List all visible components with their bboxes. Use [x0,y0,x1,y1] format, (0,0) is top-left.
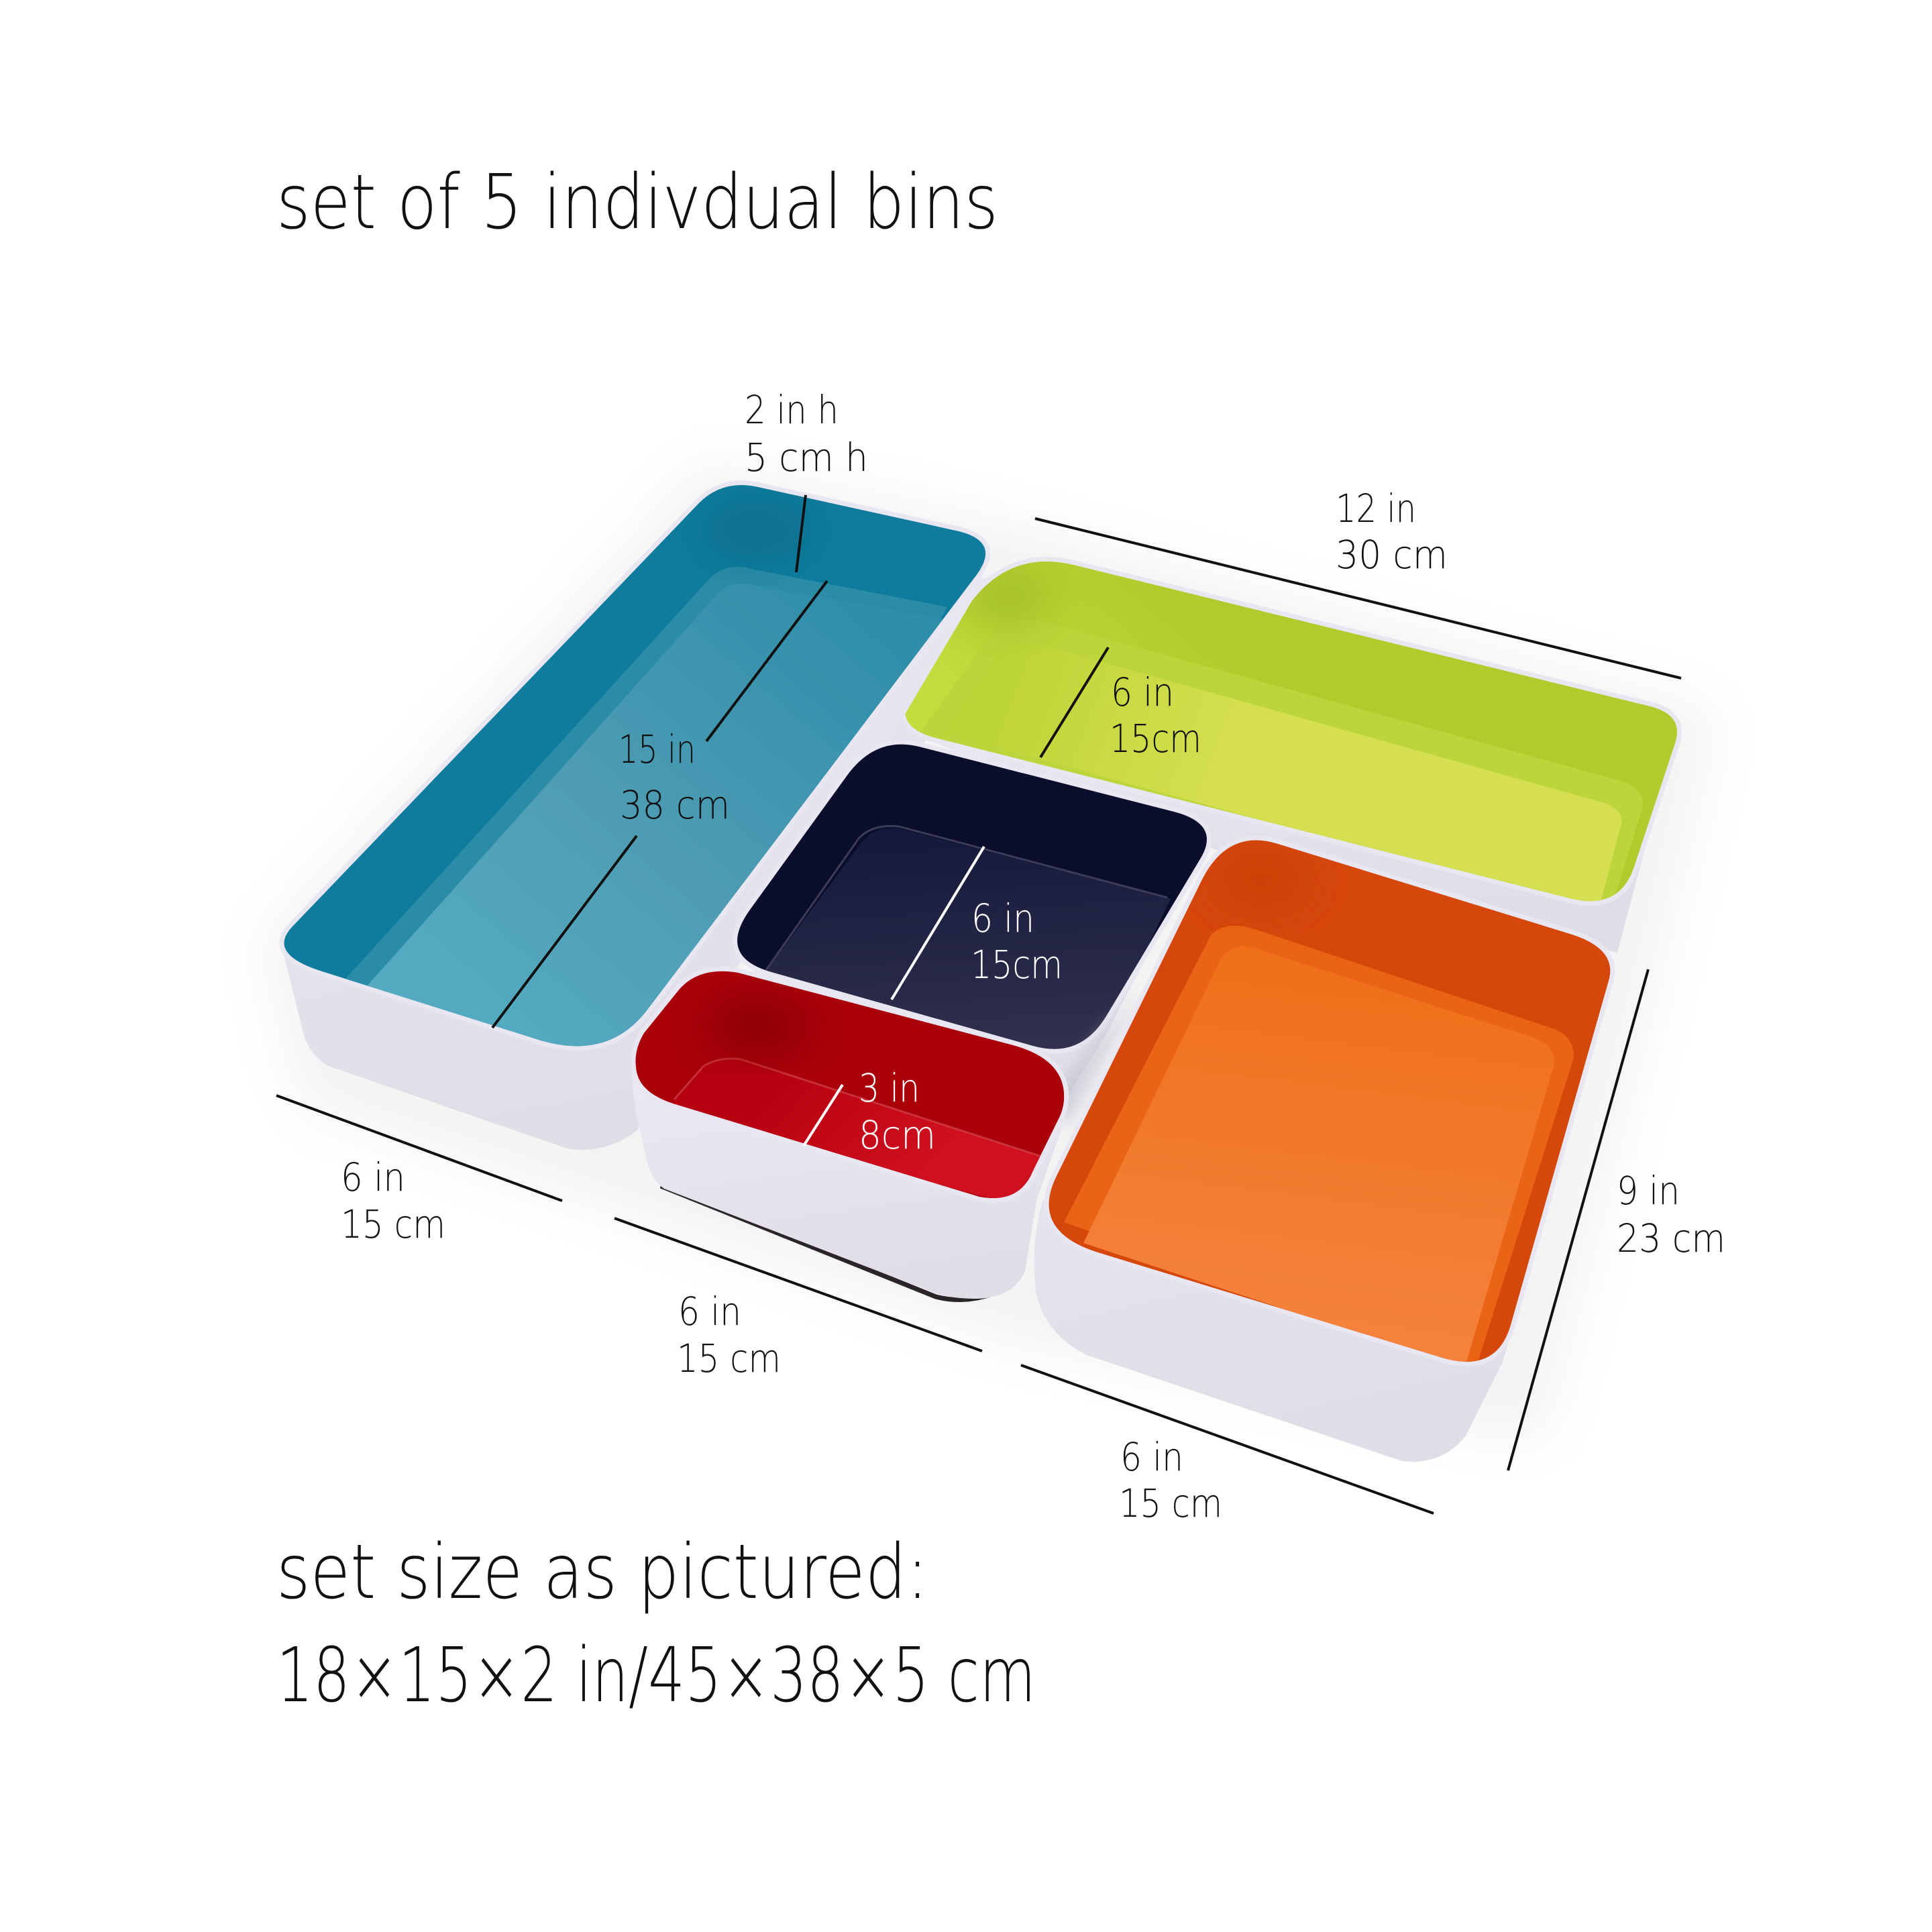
label: red depth: 8cm [859,1112,936,1158]
label: orange length [1617,1168,1725,1261]
label: green width [1336,486,1448,578]
dimension line: blue width [276,1095,562,1201]
shadow between navy and orange [1046,993,1140,1127]
label: height: 5 cm h [745,435,868,480]
dimension line: green width [1035,519,1681,678]
label: red depth [859,1065,936,1158]
label: blue length [619,727,730,828]
soft drop shadow under bins [262,463,1717,1442]
set size caption: 18×15×2 in/45×38×5 cm [276,1632,1036,1719]
label: navy depth: 15cm [971,942,1063,987]
title: set of 5 indivdual bins [276,159,998,246]
bin: orange [1033,825,1623,1462]
label: navy depth [971,896,1063,987]
label: blue width: 6 in [341,1155,405,1200]
bin: red [624,959,1080,1300]
set size caption [276,1529,1036,1719]
label: green width: 30 cm [1336,532,1448,578]
label: green depth: 6 in [1111,669,1174,715]
label: blue length: 38 cm [620,782,730,828]
label: red width: 15 cm [677,1336,781,1381]
label: orange width: 15 cm [1119,1481,1222,1526]
bin: blue [268,470,1006,1150]
dimension line: blue length lower [492,836,637,1028]
dimension line: red depth [804,1085,843,1146]
label: height [745,387,868,480]
set size caption: set size as pictured: [276,1529,928,1616]
label: blue length: 15 in [619,727,696,772]
label: orange width: 6 in [1120,1434,1183,1480]
dimension line: bin height [796,495,806,572]
label: orange width [1119,1434,1222,1526]
bin: green [906,557,1682,953]
filler: lavender side walls between bins [631,577,986,1073]
label: blue width: 15 cm [341,1201,445,1247]
label: orange length: 9 in [1617,1168,1680,1214]
bin: navy [737,743,1210,1089]
dimension line: navy depth [892,847,984,1000]
dimension line: orange length [1508,969,1648,1470]
label: red width [677,1289,781,1381]
label: orange length: 23 cm [1617,1216,1725,1261]
label: height: 2 in h [745,387,839,433]
label: green depth [1110,669,1201,761]
dimension line: blue length upper [706,581,827,741]
label: green width: 12 in [1336,486,1416,531]
label: red width: 6 in [678,1289,741,1334]
dimension line: red width [614,1218,982,1351]
dimension line: orange width [1021,1365,1434,1513]
dimension line: green depth [1040,647,1108,757]
label: navy depth: 6 in [971,896,1034,941]
label: blue width [341,1155,445,1247]
label: green depth: 15cm [1110,716,1201,761]
label: red depth: 3 in [859,1065,920,1111]
